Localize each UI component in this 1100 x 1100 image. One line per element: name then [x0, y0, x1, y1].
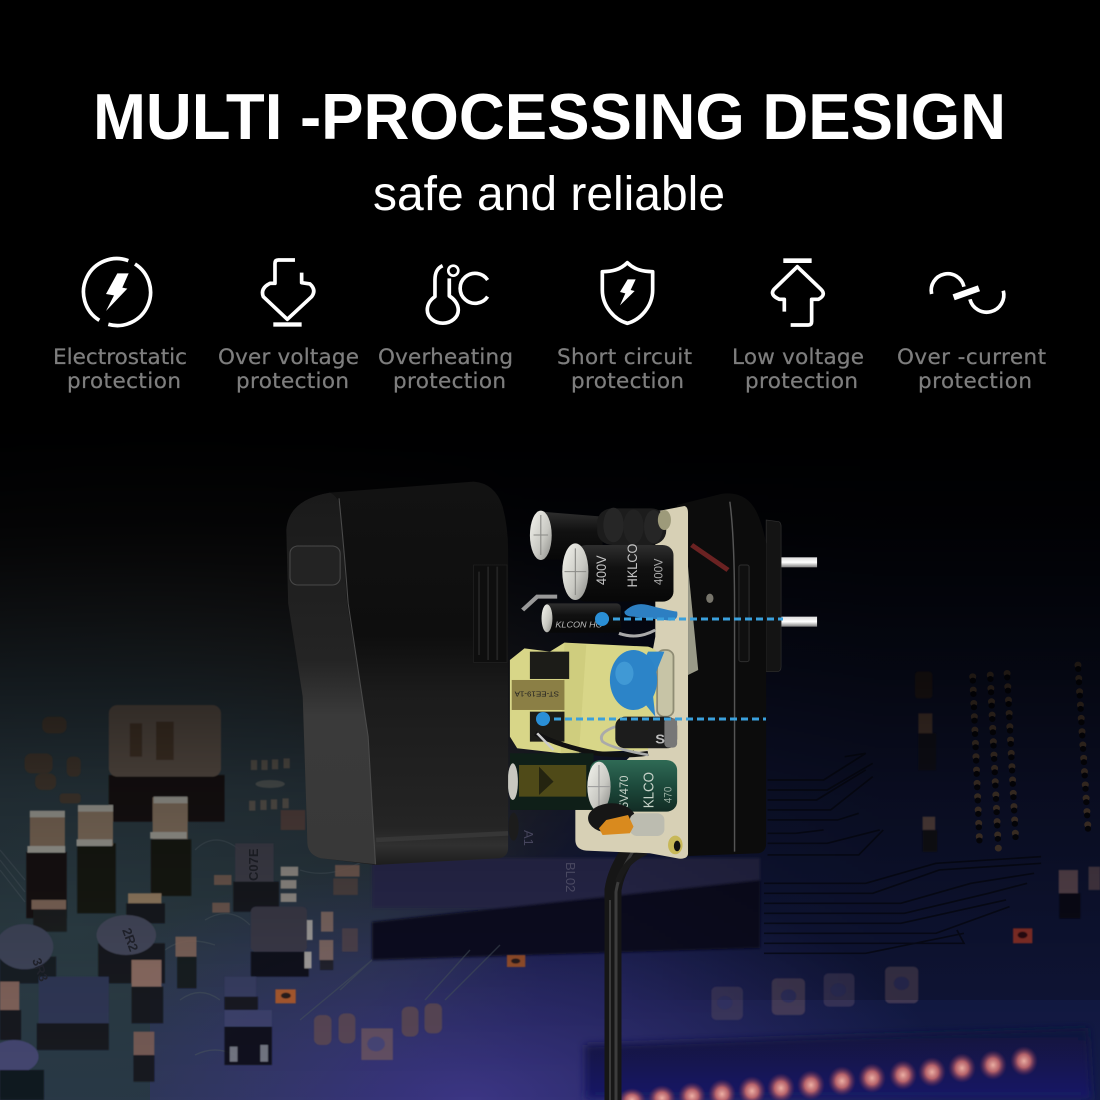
faint board markings: A1 [521, 830, 536, 846]
front shell [286, 482, 519, 865]
right board bead rows [973, 665, 1088, 848]
green capacitor: KLCO [640, 772, 657, 808]
caption: electrostatic: Electrostatic [53, 345, 187, 370]
faint board markings: BL02 [563, 862, 578, 892]
caption: electrostatic: protection [67, 369, 181, 394]
left board traces [0, 840, 500, 1055]
title: MULTI -PROCESSING DESIGN [93, 80, 1006, 153]
capacitor 3 with leads [523, 597, 655, 636]
power adapter, exploded view [286, 482, 817, 1100]
transformer [510, 643, 661, 753]
diode with looped wire [535, 717, 677, 755]
caption: low voltage [732, 345, 864, 394]
protection icon row [83, 258, 1004, 327]
circuit board [575, 506, 688, 859]
green capacitor: 470 [663, 786, 675, 803]
board slot detail [657, 650, 673, 717]
caption: low voltage: protection [745, 369, 858, 394]
caption: over voltage: protection [236, 369, 349, 394]
diode with looped wire: S [655, 731, 665, 746]
blue disc capacitor [610, 650, 664, 717]
background: circuit board: 2R2 [119, 926, 141, 953]
capacitor 1 [530, 511, 603, 560]
board mount hole [668, 836, 683, 854]
inductor [597, 508, 671, 545]
small blue capacitor [624, 604, 677, 621]
capacitor 2: 400V [594, 555, 609, 585]
green capacitor [587, 760, 677, 812]
icon: over-current wave [931, 274, 1004, 312]
green capacitor: 5V470 [617, 775, 631, 808]
callout dashed line lower [536, 712, 766, 726]
prongs [781, 557, 817, 627]
background: circuit board: 3R3 [29, 956, 51, 983]
faint board markings [521, 830, 578, 892]
capacitor 2: HKLCO [625, 544, 640, 587]
caption: over-current: protection [918, 369, 1032, 394]
icon: electrostatic bolt in ring [83, 259, 151, 326]
transformer: ST-EE19-1A [514, 690, 559, 698]
caption: short circuit [557, 345, 692, 394]
chip block under adapter [372, 858, 760, 960]
background: circuit board: C07E [246, 848, 261, 881]
caption: overheating: protection [393, 369, 506, 394]
plug base [766, 520, 781, 672]
captions [53, 345, 1046, 394]
capacitor 2: 400V [651, 558, 666, 585]
subtitle: safe and reliable [373, 168, 725, 221]
caption: low voltage: Low voltage [732, 345, 864, 370]
callout dashed line upper [595, 612, 783, 626]
icon: overheating thermometer [427, 266, 488, 323]
caption: over voltage: Over voltage [218, 345, 359, 370]
caption: over voltage [218, 345, 359, 394]
red LED row [618, 1046, 1038, 1100]
power cord [610, 845, 646, 1100]
caption: short circuit: Short circuit [557, 345, 692, 370]
caption: electrostatic [53, 345, 187, 394]
LED strip base [585, 1028, 1092, 1100]
adapter parts in device coordinates [286, 482, 817, 865]
caption: overheating [378, 345, 513, 394]
caption: short circuit: protection [571, 369, 684, 394]
caption: overheating: Overheating [378, 345, 513, 370]
right board parts [711, 672, 1100, 1020]
icon: over voltage arrow [262, 260, 314, 327]
olive capacitor [508, 753, 594, 810]
icon: low voltage arrow [772, 258, 823, 325]
capacitor 2 [562, 543, 673, 602]
left board components [0, 705, 525, 1100]
rear housing [677, 493, 766, 856]
caption: over-current: Over -current [897, 345, 1046, 370]
orange fuse and cylinder [588, 803, 664, 836]
caption: over-current [897, 345, 1046, 394]
right board traces [764, 753, 1041, 953]
capacitor 3 with leads: KLCON HC [555, 620, 603, 629]
icon: short circuit shield [602, 263, 653, 323]
